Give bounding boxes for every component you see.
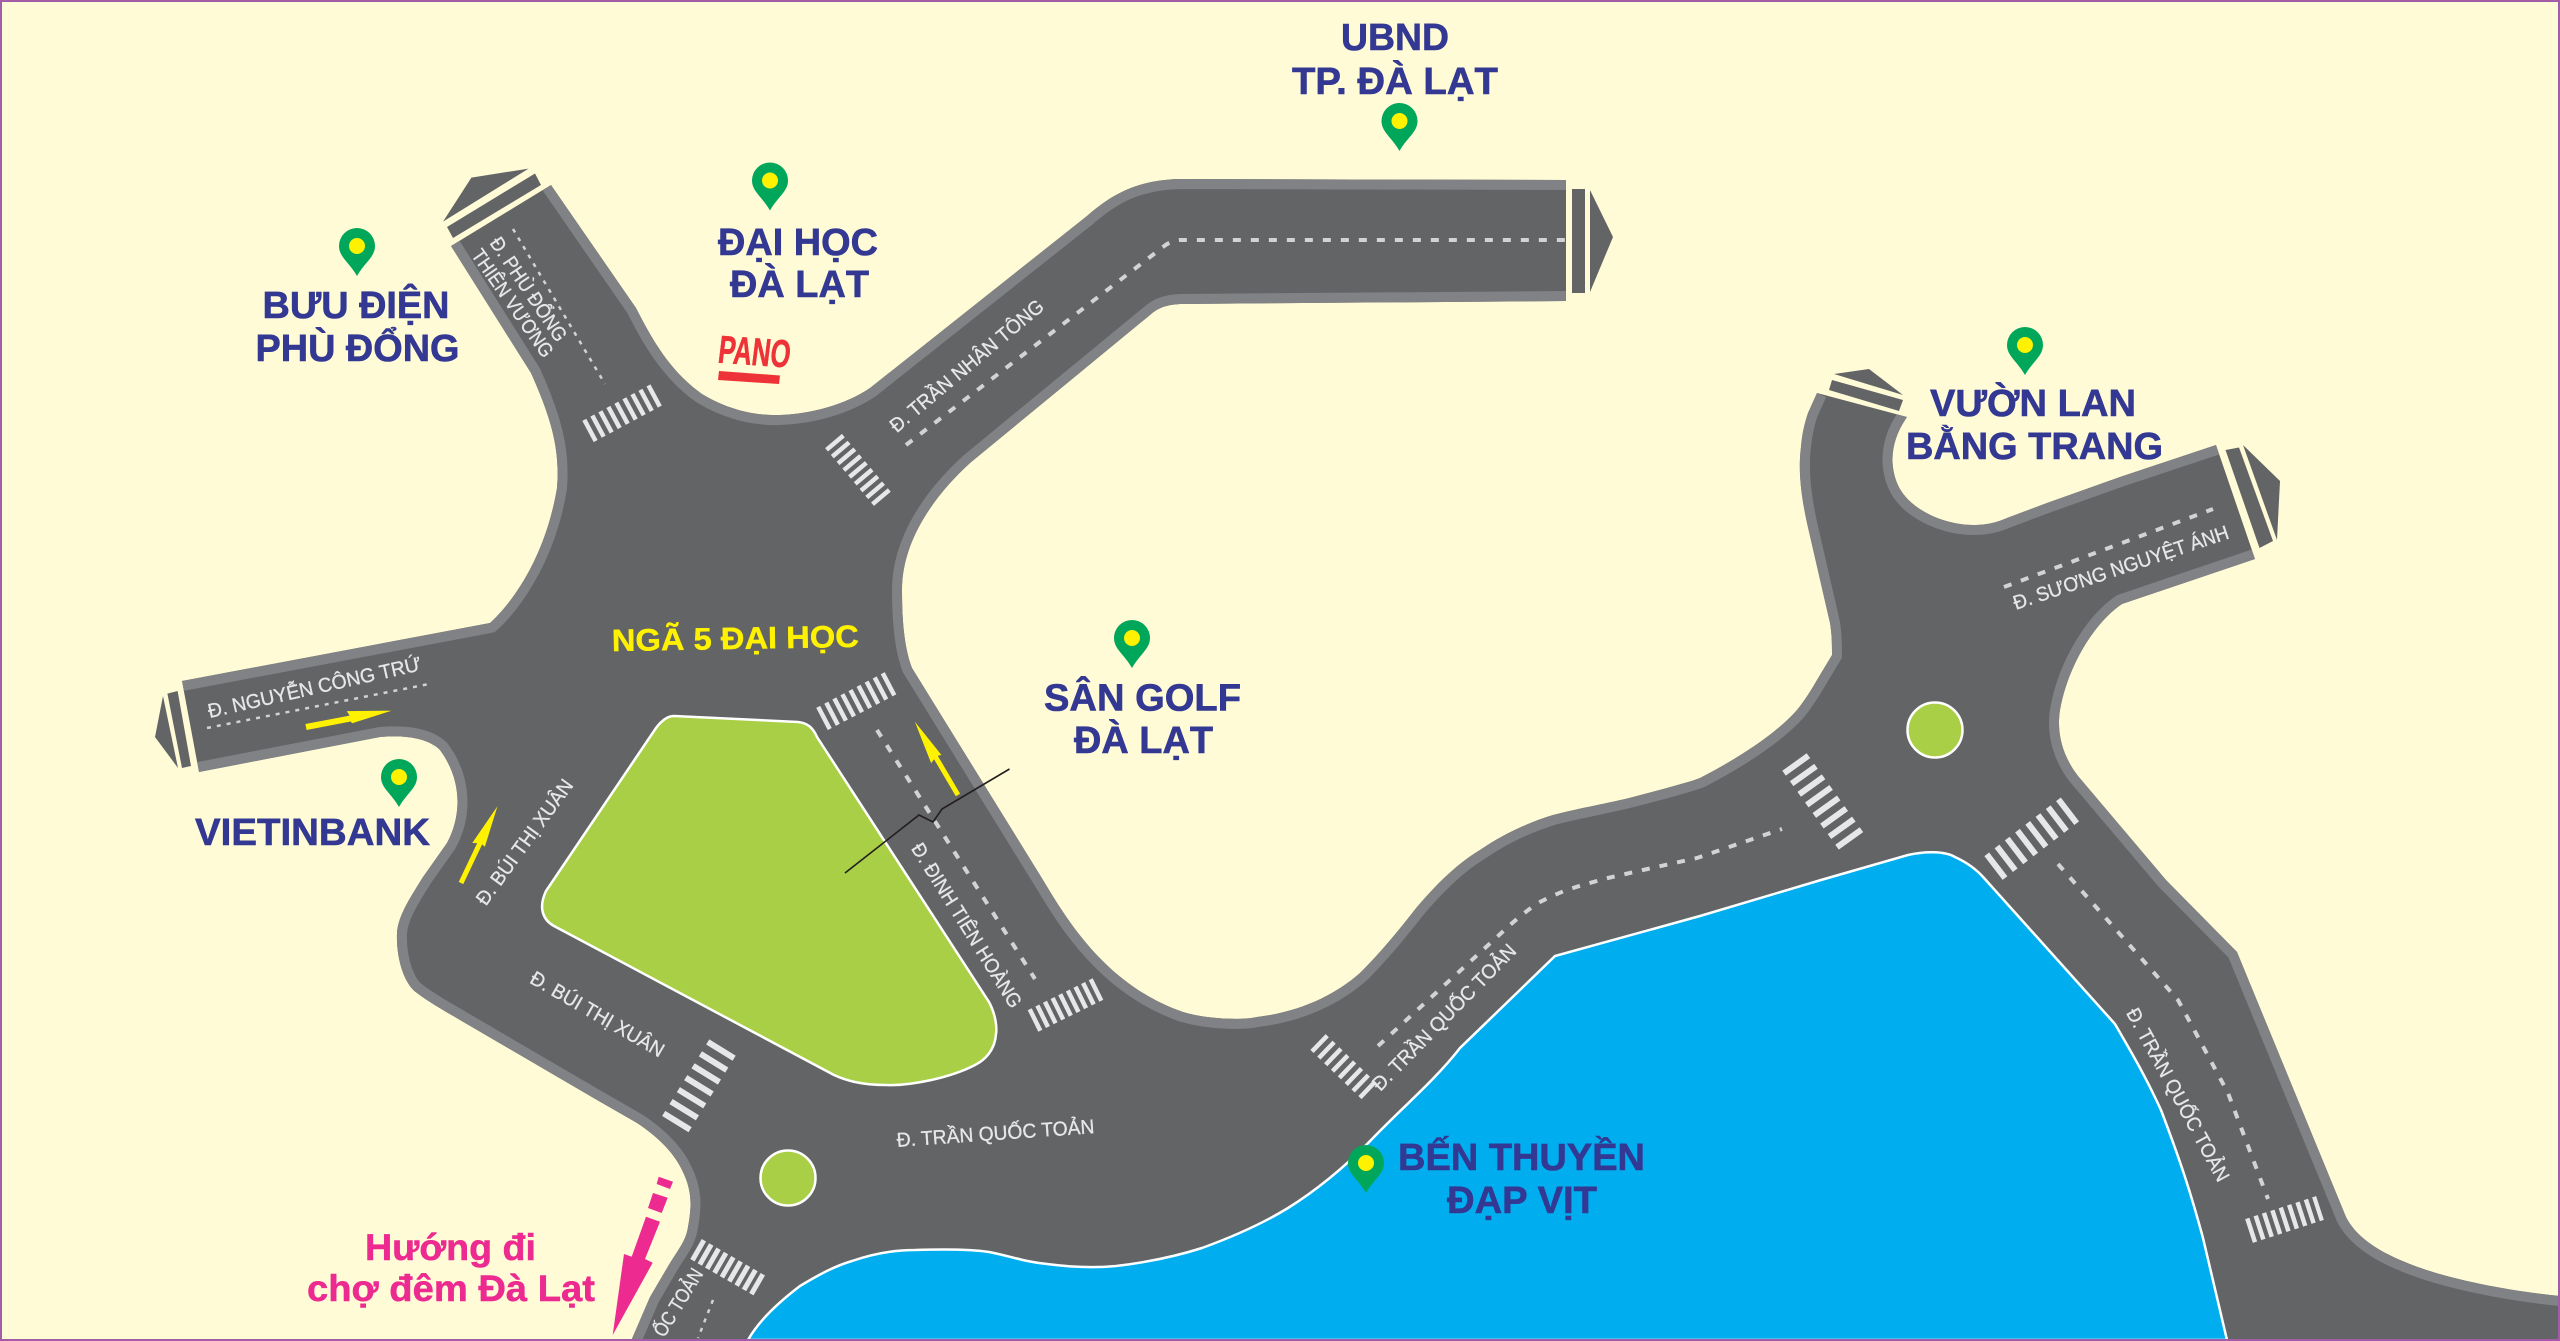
road names: Đ. NGUYỄN CÔNG TRỨ (206, 652, 423, 723)
section break line (845, 769, 1010, 873)
road names: Đ. BÚI THỊ XUÂN (471, 775, 578, 910)
label: Bến Thuyền Đạp Vịt (1398, 1135, 1645, 1222)
intersection name: NGÃ 5 ĐẠI HỌC (612, 619, 859, 658)
lane dashes (207, 229, 2268, 1338)
road names: Đ. BÚI THỊ XUÂN (526, 967, 668, 1062)
label: Vườn Lan Bằng Trang (1906, 381, 2163, 468)
label: Sân Golf Đà Lạt: SÂN GOLF (1044, 676, 1241, 720)
label: Vườn Lan Bằng Trang: BẰNG TRANG (1906, 424, 2163, 468)
label: Đại Học Đà Lạt (718, 222, 878, 306)
direction arrow: Đinh Tiên Hoàng (909, 719, 963, 799)
direction arrow: Nguyễn Công Trứ (305, 703, 392, 732)
pin: Bưu Điện (339, 228, 375, 276)
road names: Đ. PHÙ ĐỔNG (485, 232, 573, 346)
roundabout left (760, 1150, 816, 1206)
label: Sân Golf Đà Lạt: ĐÀ LẠT (1074, 718, 1213, 762)
label: Hướng đi chợ đêm Đà Lạt: chợ đêm Đà Lạt (307, 1268, 595, 1309)
pin: Vườn Lan (2007, 327, 2043, 375)
label: Đại Học Đà Lạt: ĐÀ LẠT (730, 262, 869, 306)
label: Đại Học Đà Lạt: ĐẠI HỌC (718, 222, 878, 264)
road names: Đ. TRẦN NHÂN TÔNG (885, 295, 1049, 437)
PANO logo (716, 329, 793, 384)
road names: Đ. TRẦN QUỐC TOẢN (2121, 1004, 2235, 1186)
lake (748, 852, 2227, 1340)
road names: Đ. TRẦN QUỐC TOẢN (1367, 939, 1521, 1096)
label: UBND TP. Đà Lạt: UBND (1341, 17, 1449, 59)
label: UBND TP. Đà Lạt (1292, 17, 1498, 103)
PANO logo: PANO (716, 329, 793, 376)
label: Hướng đi chợ đêm Đà Lạt: Hướng đi (365, 1227, 536, 1268)
pin: UBND (1382, 103, 1418, 151)
label: Hướng đi chợ đêm Đà Lạt (307, 1227, 595, 1309)
road end cap: Trần Nhân Tông (1572, 189, 1613, 293)
label: Sân Golf Đà Lạt (1044, 676, 1241, 762)
road names: Đ. ĐINH TIÊN HOÀNG (906, 839, 1027, 1012)
label: UBND TP. Đà Lạt: TP. ĐÀ LẠT (1292, 59, 1498, 103)
label: Bến Thuyền Đạp Vịt: ĐẠP VỊT (1447, 1180, 1597, 1222)
label: Vietinbank: VIETINBANK (195, 812, 431, 854)
label: Bến Thuyền Đạp Vịt: BẾN THUYỀN (1398, 1135, 1645, 1179)
label: Bưu Điện Phù Đổng (256, 283, 460, 370)
pin: Đại Học (752, 162, 788, 210)
pin: Vietinbank (381, 759, 417, 807)
road names: Đ. TRẦN QUỐC TOẢN (896, 1114, 1095, 1152)
crosswalks (588, 394, 2320, 1286)
road names (206, 232, 2235, 1341)
pin: Bến Thuyền (1348, 1145, 1384, 1193)
label: Vườn Lan Bằng Trang: VƯỜN LAN (1930, 381, 2136, 425)
pin: Sân Golf (1114, 620, 1150, 668)
park (542, 716, 996, 1085)
label: Bưu Điện Phù Đổng: BƯU ĐIỆN (262, 283, 450, 327)
road end cap: Nguyễn Công Trứ (155, 691, 191, 768)
road names: ỐC TOẢN (648, 1264, 708, 1341)
road names: Đ. SƯƠNG NGUYỆT ÁNH (2010, 521, 2232, 615)
pink direction arrow (613, 1177, 673, 1335)
direction arrow: Bùi Thị Xuân (455, 803, 503, 886)
road names: THIÊN VƯƠNG (466, 245, 558, 362)
road end cap: Vườn Lan (1829, 369, 1903, 411)
roundabout right (1908, 702, 1962, 758)
road end cap: Phù Đổng Thiên Vương (443, 169, 541, 238)
road end cap: Sương Nguyệt Ánh (2226, 445, 2280, 548)
label: Bưu Điện Phù Đổng: PHÙ ĐỔNG (256, 325, 460, 370)
